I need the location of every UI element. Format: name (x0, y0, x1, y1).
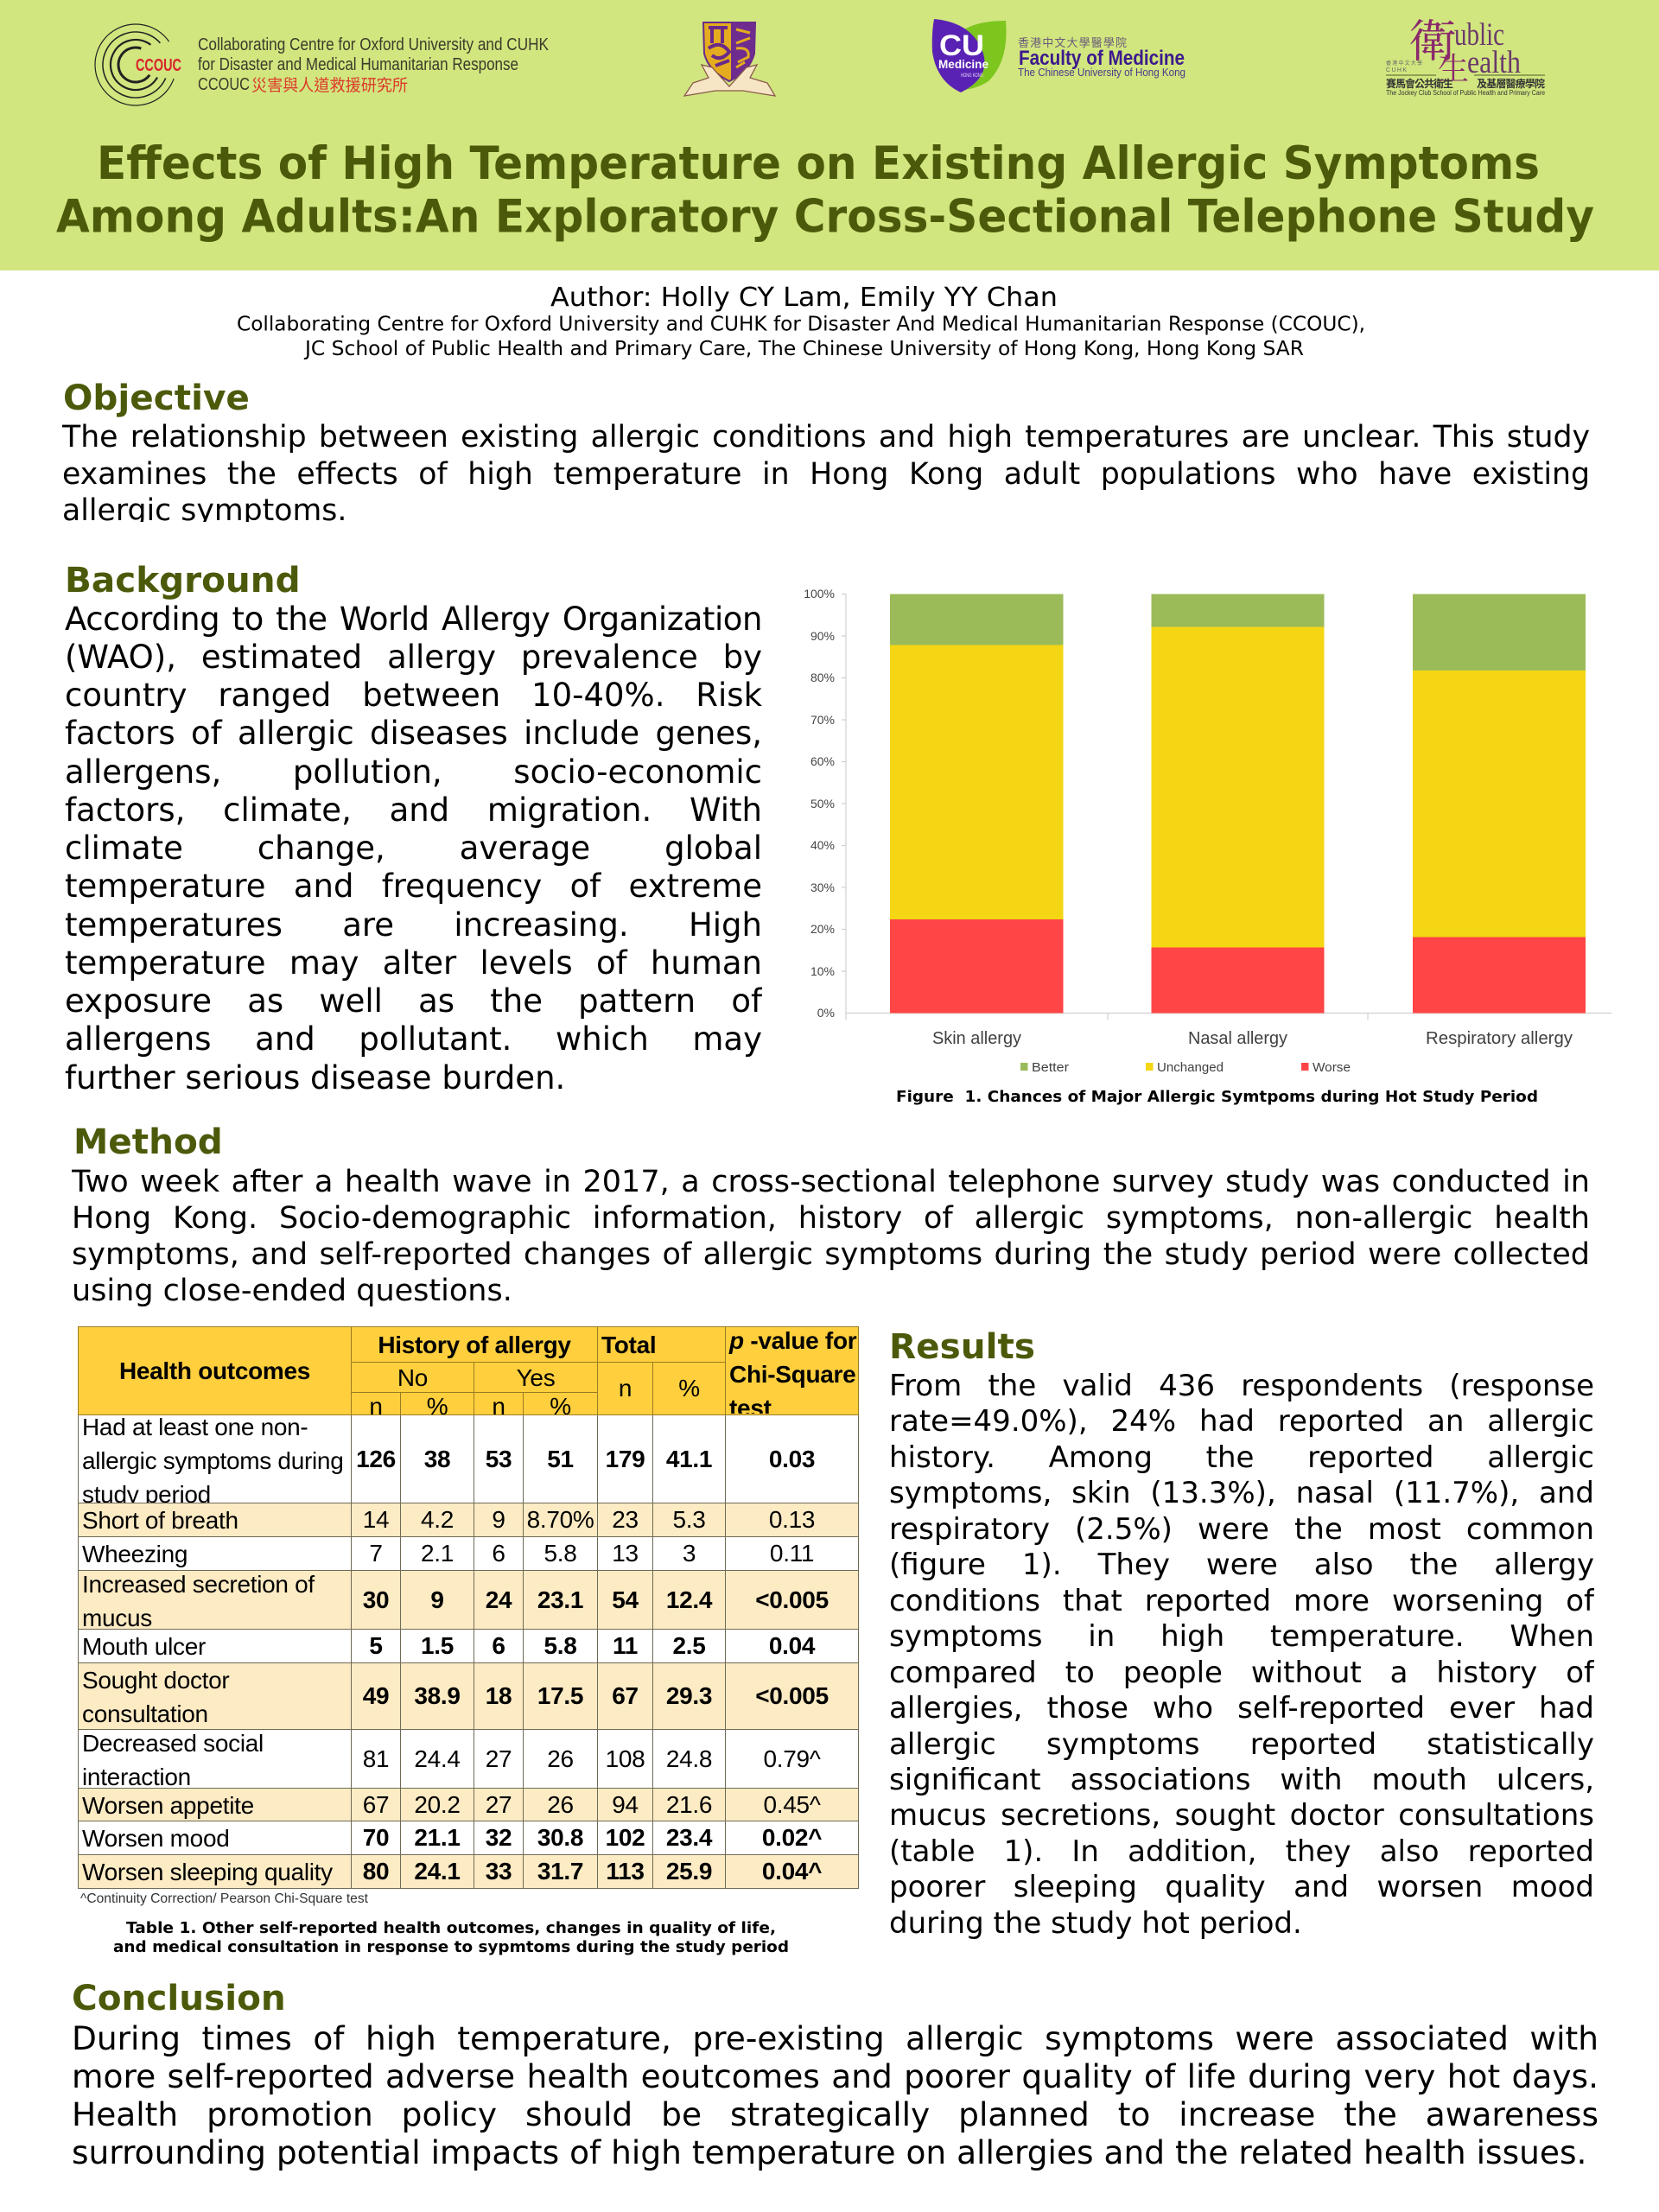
authors: Author: Holly CY Lam, Emily YY Chan (550, 283, 1058, 313)
row: wheezing: 0.11 (770, 1540, 814, 1567)
logo: Public Health: CUHK (1386, 67, 1407, 73)
row: worsen appetite: 94 (612, 1790, 639, 1818)
text: background: According to the World Allergy Organization (65, 600, 762, 638)
text: results (889, 1369, 1594, 1941)
y axis labels: 20% (810, 922, 835, 936)
text: background: allergens and pollutant. which may (65, 1020, 762, 1058)
text: background: factors of allergic diseases include genes, (65, 715, 762, 752)
row: sought doctor consultation: Sought doctor (82, 1667, 229, 1694)
row: worsen mood: 32 (486, 1824, 512, 1851)
header band (0, 0, 1659, 270)
table footnote and caption (80, 1891, 789, 1956)
row: worsen mood (82, 1824, 822, 1852)
table footnote and caption: ^Continuity Correction/ Pearson Chi-Square test (80, 1891, 369, 1906)
figure 1: stacked bar chart (804, 587, 1611, 1106)
text: results: mucus secretions, sought doctor consultations (889, 1798, 1594, 1833)
text: background: exposure as well as the pattern of (65, 982, 762, 1020)
y axis labels: 40% (810, 838, 835, 852)
y axis labels: 100% (804, 587, 835, 601)
logo: CU Medicine: The Chinese University of Hong Kong (1018, 66, 1185, 79)
axes (842, 594, 1611, 1020)
heading: Results: Results (889, 1325, 1035, 1367)
authors (237, 283, 1365, 360)
row: short of breath: 23 (612, 1506, 639, 1533)
row: sought doctor consultation: 67 (612, 1682, 639, 1709)
row: sought doctor consultation: 38.9 (414, 1682, 461, 1709)
row: increased secretion of mucus: 54 (612, 1586, 639, 1612)
y axis labels: 0% (817, 1006, 835, 1020)
y axis labels (804, 587, 835, 1020)
row: worsen appetite (79, 1789, 858, 1821)
logo: Public Health: 生 (1438, 45, 1469, 89)
row: non-allergic symptoms: 179 (606, 1445, 645, 1472)
row: worsen appetite: 67 (363, 1790, 389, 1818)
row: decreased social interaction: 24.4 (414, 1745, 461, 1771)
row: worsen mood: 0.02^ (762, 1824, 822, 1851)
text: results: conditions that reported more worsening of (889, 1584, 1594, 1618)
text: background (65, 600, 762, 1096)
text: results: symptoms, skin (13.3%), nasal (11.7%), and (889, 1476, 1594, 1510)
row: worsen mood: Worsen mood (82, 1825, 229, 1852)
row: worsen sleeping quality: 31.7 (537, 1858, 583, 1885)
row: increased secretion of mucus: 12.4 (666, 1586, 712, 1612)
row: short of breath: 14 (363, 1506, 389, 1533)
y axis labels: 70% (810, 713, 835, 727)
logo: Public Health (1386, 5, 1545, 97)
row: mouth ulcer: 0.04 (769, 1632, 815, 1659)
row: worsen appetite: 0.45^ (763, 1790, 821, 1818)
row: mouth ulcer (82, 1632, 816, 1660)
row: mouth ulcer: 6 (492, 1632, 505, 1659)
row: sought doctor consultation (79, 1663, 858, 1729)
row: decreased social interaction: 26 (547, 1745, 574, 1771)
row: non-allergic symptoms (82, 1415, 815, 1503)
table header row 1: Health outcomes (119, 1357, 310, 1384)
y axis labels: 80% (810, 671, 835, 684)
row: short of breath: 5.3 (673, 1506, 706, 1533)
y axis labels: 50% (810, 797, 835, 810)
row: worsen sleeping quality: 25.9 (666, 1858, 712, 1885)
category labels: Nasal allergy (1188, 1029, 1287, 1048)
row: sought doctor consultation: 29.3 (666, 1682, 712, 1709)
table header row 2: % (678, 1375, 700, 1402)
text: method: symptoms, and self-reported changes of allergic symptoms during the study period were collected (72, 1237, 1590, 1272)
heading: Conclusion: Conclusion (72, 1977, 286, 2018)
text: results: significant associations with mouth ulcers, (889, 1763, 1594, 1797)
y axis labels: 30% (810, 880, 835, 894)
row: worsen appetite: Worsen appetite (82, 1792, 254, 1819)
row: wheezing: 2.1 (421, 1540, 454, 1567)
text: method: using close-ended questions. (72, 1274, 512, 1308)
row: worsen mood: 30.8 (537, 1824, 583, 1851)
text: conclusion: During times of high temperature, pre-existing allergic symptoms were associated with (72, 2018, 1599, 2056)
row: non-allergic symptoms: allergic symptoms during (82, 1447, 343, 1474)
row: increased secretion of mucus: <0.005 (755, 1586, 829, 1612)
row: wheezing (82, 1540, 814, 1567)
text: results: compared to people without a history of (889, 1656, 1594, 1690)
table header row 1: Chi-Square (729, 1361, 855, 1388)
row: non-allergic symptoms: 53 (486, 1445, 512, 1472)
row: decreased social interaction: 81 (363, 1745, 389, 1771)
title: Effects of High Temperature on Existing Allergic Symptoms (97, 137, 1540, 190)
table header row 1 (79, 1327, 858, 1888)
row: sought doctor consultation: 17.5 (537, 1682, 583, 1709)
table header row 3 (352, 1393, 597, 1414)
logo: Public Health: The Jockey Club School of Public Health and Primary Care (1386, 89, 1545, 97)
text: results: symptoms in high temperature. When (889, 1619, 1594, 1654)
table header row 2: No (397, 1364, 428, 1391)
logo: Public Health: ealth (1467, 45, 1521, 80)
text: results: respiratory (2.5%) were the most common (889, 1512, 1594, 1547)
row: worsen sleeping quality: 113 (606, 1858, 645, 1885)
row: mouth ulcer: Mouth ulcer (82, 1633, 206, 1660)
row: decreased social interaction (82, 1730, 821, 1788)
logo: CU Medicine (932, 19, 1185, 92)
y axis labels: 90% (810, 629, 835, 643)
logo: CCOUC: CCOUC (136, 56, 181, 75)
heading: Objective: Objective (63, 377, 250, 418)
row: sought doctor consultation: 18 (486, 1682, 512, 1709)
logos and title (56, 5, 1594, 360)
logo: CCOUC: Collaborating Centre for Oxford University and CUHK (198, 35, 550, 54)
row: worsen appetite: 27 (486, 1790, 512, 1818)
row: decreased social interaction: 24.8 (666, 1745, 712, 1771)
row: worsen sleeping quality: 80 (363, 1858, 389, 1885)
logo: CCOUC (84, 13, 550, 117)
row: short of breath (79, 1503, 858, 1536)
logo: CU Medicine: HONG KONG (961, 73, 983, 79)
logo: CU Medicine: Faculty of Medicine (1019, 47, 1185, 70)
logo: CU Medicine: Medicine (938, 57, 988, 71)
text: method (72, 1165, 1590, 1308)
text: method: Hong Kong. Socio-demographic information, history of allergic symptoms, non-allergic health (72, 1201, 1590, 1236)
text: background: factors, climate, and migration. With (65, 791, 762, 829)
text: background: (WAO), estimated allergy prevalence by (65, 639, 762, 676)
text: conclusion: surrounding potential impacts of high temperature on allergies and the related health issues. (72, 2133, 1586, 2171)
text: results: rate=49.0%), 24% had reported an allergic (889, 1404, 1594, 1439)
row: worsen sleeping quality: 33 (486, 1858, 512, 1885)
row: mouth ulcer: 5.8 (544, 1632, 577, 1659)
row: worsen sleeping quality (79, 1855, 858, 1888)
row: worsen sleeping quality: Worsen sleeping quality (82, 1859, 333, 1885)
row: sought doctor consultation: consultation (82, 1700, 208, 1727)
authors: Collaborating Centre for Oxford University and CUHK for Disaster And Medical Humanitarian Response (CCOUC), (237, 313, 1365, 335)
logo: CUHK crest (684, 22, 775, 96)
table footnote and caption: Table 1. Other self-reported health outcomes, changes in quality of life, (126, 1919, 776, 1937)
y axis labels: 60% (810, 754, 835, 768)
text: results: poorer sleeping quality and worsen mood (889, 1870, 1594, 1904)
text: background: temperatures are increasing. High (65, 906, 762, 944)
legend: Worse (1313, 1060, 1351, 1075)
text: conclusion (72, 2018, 1599, 2171)
row: increased secretion of mucus: Increased secretion of (82, 1571, 315, 1598)
row: worsen mood: 23.4 (666, 1824, 712, 1851)
row: worsen appetite: 26 (547, 1790, 574, 1818)
figure caption: Figure 1. Chances of Major Allergic Symtpoms during Hot Study Period (896, 1088, 1538, 1106)
row: mouth ulcer: 11 (613, 1632, 638, 1659)
logo: Public Health: 香港中文大學 (1386, 60, 1422, 67)
row: worsen appetite: 20.2 (414, 1790, 461, 1818)
title (56, 137, 1594, 244)
text: background: further serious disease burden. (65, 1059, 565, 1096)
row: non-allergic symptoms: 0.03 (769, 1445, 815, 1472)
logo: CCOUC: 災害與人道救援研究所 (251, 76, 408, 95)
table 1: health outcomes (78, 1326, 859, 1889)
text: background: country ranged between 10-40%. Risk (65, 677, 762, 714)
table header row 2: n (619, 1375, 632, 1402)
category labels (932, 1029, 1573, 1048)
row: worsen sleeping quality: 0.04^ (762, 1858, 822, 1885)
row: decreased social interaction: 108 (606, 1745, 645, 1771)
authors: JC School of Public Health and Primary Care, The Chinese University of Hong Kong, Hong Kong SAR (303, 338, 1304, 360)
legend: Better (1032, 1060, 1069, 1075)
bar: skin allergy (890, 594, 1063, 1013)
text: conclusion: Health promotion policy should be strategically planned to increase the awareness (72, 2095, 1599, 2133)
row: decreased social interaction: 0.79^ (763, 1745, 821, 1771)
y axis labels: 10% (810, 964, 835, 978)
text: objective (62, 420, 1590, 522)
text: results: (table 1). In addition, they also reported (889, 1834, 1594, 1869)
row: decreased social interaction: Decreased social (82, 1730, 264, 1757)
category labels: Skin allergy (932, 1029, 1021, 1048)
logo: Public Health: 及基層醫療學院 (1477, 77, 1545, 90)
text: background: temperature and frequency of extreme (65, 868, 762, 905)
logo: CCOUC: for Disaster and Medical Humanitarian Response (198, 55, 518, 74)
text: objective: The relationship between existing allergic conditions and high temperatures are unclear. This study (62, 420, 1590, 454)
table header row 1: History of allergy (378, 1332, 571, 1358)
text: results: allergic symptoms reported statistically (889, 1727, 1594, 1762)
row: short of breath: Short of breath (82, 1507, 238, 1534)
text: results: From the valid 436 respondents (response (889, 1369, 1594, 1403)
title: Among Adults:An Exploratory Cross-Sectional Telephone Study (56, 190, 1594, 244)
text: background: temperature may alter levels of human (65, 944, 762, 982)
row: wheezing: 13 (612, 1540, 639, 1567)
row: short of breath: 9 (492, 1506, 505, 1533)
text: results: during the study hot period. (889, 1906, 1302, 1941)
logo: Public Health: ublic (1454, 17, 1504, 53)
row: mouth ulcer: 1.5 (421, 1632, 454, 1659)
row: worsen mood: 102 (606, 1824, 645, 1851)
text: results: history. Among the reported allergic (889, 1440, 1594, 1475)
row: increased secretion of mucus: 30 (363, 1586, 389, 1612)
row: increased secretion of mucus: 9 (430, 1586, 444, 1612)
text: conclusion: more self-reported adverse health eoutcomes and poorer quality of life during very hot days. (72, 2057, 1599, 2095)
row: non-allergic symptoms: 38 (424, 1445, 450, 1472)
text: results: (figure 1). They were also the allergy (889, 1548, 1594, 1582)
row: sought doctor consultation: 49 (363, 1682, 389, 1709)
bar: nasal allergy (1151, 594, 1324, 1013)
heading: Background: Background (65, 559, 301, 601)
row: wheezing: Wheezing (82, 1541, 188, 1567)
row: short of breath: 4.2 (421, 1506, 454, 1533)
text: method: Two week after a health wave in 2017, a cross-sectional telephone survey study was conducted in (72, 1165, 1590, 1199)
logo: Public Health: 衛 (1408, 5, 1457, 70)
row: wheezing: 6 (492, 1540, 505, 1567)
row: worsen mood: 21.1 (414, 1824, 461, 1851)
row: non-allergic symptoms: 41.1 (666, 1445, 712, 1472)
row: worsen mood: 70 (363, 1824, 389, 1851)
text: objective: examines the effects of high temperature in Hong Kong adult populations who have existing (62, 456, 1590, 491)
row: increased secretion of mucus: 24 (486, 1586, 512, 1612)
row: wheezing: 3 (683, 1540, 696, 1567)
row: short of breath: 0.13 (769, 1506, 815, 1533)
row: non-allergic symptoms: 51 (547, 1445, 574, 1472)
text: background: climate change, average global (65, 830, 762, 867)
row: sought doctor consultation: <0.005 (755, 1682, 829, 1709)
table header row 2: Yes (517, 1364, 555, 1391)
row: decreased social interaction: 27 (486, 1745, 512, 1771)
logo: CCOUC: CCOUC (198, 75, 250, 94)
row: mouth ulcer: 5 (369, 1632, 383, 1659)
row: worsen sleeping quality: 24.1 (414, 1858, 461, 1885)
table header row 2 (352, 1363, 725, 1414)
logo: Public Health: 賽馬會公共衛生 (1386, 77, 1453, 90)
category labels: Respiratory allergy (1426, 1029, 1573, 1048)
row: increased secretion of mucus: 23.1 (537, 1586, 583, 1612)
legend: Unchanged (1157, 1060, 1224, 1075)
table footnote and caption: and medical consultation in response to sypmtoms during the study period (113, 1938, 789, 1956)
row: short of breath: 8.70% (527, 1506, 594, 1533)
text: results: allergies, those who self-reported ever had (889, 1691, 1594, 1726)
legend (1020, 1060, 1351, 1075)
table header row 1: Total (601, 1332, 656, 1358)
row: increased secretion of mucus (79, 1571, 858, 1629)
row: wheezing: 7 (369, 1540, 383, 1567)
row: wheezing: 5.8 (544, 1540, 577, 1567)
logo: CU Medicine: CU (939, 29, 984, 62)
row: non-allergic symptoms: 126 (356, 1445, 396, 1472)
row: mouth ulcer: 2.5 (673, 1632, 706, 1659)
bar: respiratory allergy (1413, 594, 1586, 1013)
row: worsen appetite: 21.6 (666, 1790, 712, 1818)
heading: Method: Method (73, 1121, 223, 1162)
text: background: allergens, pollution, socio-economic (65, 753, 762, 790)
logo: CU Medicine: 香港中文大學醫學院 (1018, 36, 1127, 49)
